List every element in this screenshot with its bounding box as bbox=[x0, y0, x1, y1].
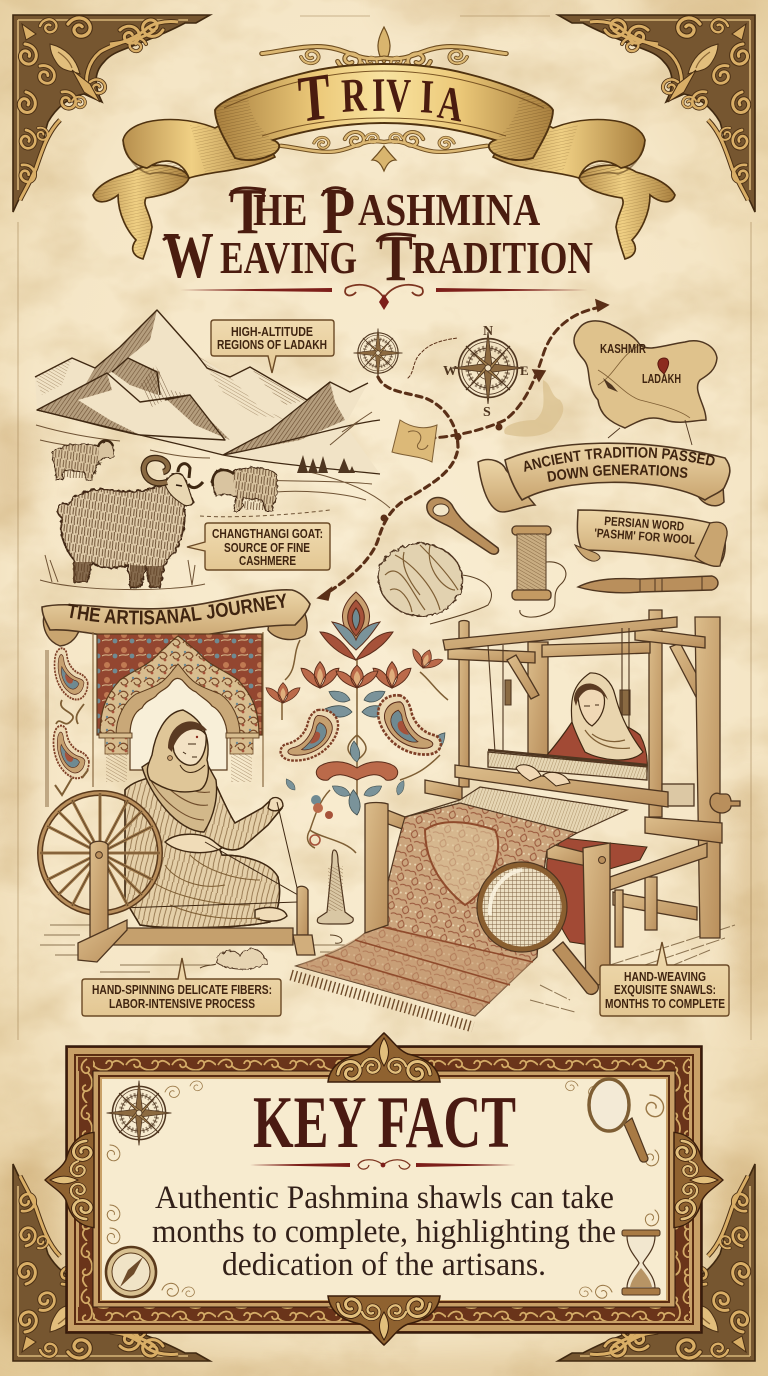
spinning frame base bbox=[113, 928, 293, 945]
ribbon: persian word pashm bbox=[575, 510, 727, 566]
front loom posts bbox=[365, 802, 610, 988]
ground lines bbox=[40, 925, 345, 972]
callout: changthangi goat: CASHMERE bbox=[239, 554, 296, 568]
loom frame back bbox=[443, 610, 720, 938]
callout: changthangi goat: CHANGTHANGI GOAT: bbox=[212, 527, 323, 541]
illustration: small parchment map bbox=[392, 420, 437, 462]
callout: high-altitude regions: HIGH-ALTITUDE bbox=[231, 325, 313, 339]
ornate frame bbox=[66, 1046, 702, 1333]
illustration: wooden spinning tool bbox=[427, 498, 498, 554]
ribbon: ancient tradition: ANCIENT TRADITION PASSED bbox=[524, 446, 715, 472]
illustration: floral paisley motif bbox=[266, 592, 450, 853]
paisleys bbox=[281, 710, 338, 761]
key fact text: dedication of the artisans. bbox=[222, 1247, 546, 1283]
illustration: thread spool bbox=[512, 526, 566, 617]
callout: high-altitude regions: REGIONS OF LADAKH bbox=[217, 338, 327, 352]
icon: pocket compass bbox=[106, 1247, 156, 1297]
callout: changthangi goat: SOURCE OF FINE bbox=[224, 541, 310, 555]
callout: hand-weaving: EXQUISITE SNAWLS: bbox=[614, 983, 716, 997]
callout: hand-weaving: HAND-WEAVING bbox=[624, 970, 706, 984]
illustration: changthangi goats bbox=[40, 440, 330, 590]
map: kashmir and ladakh bbox=[574, 321, 717, 445]
large goat bbox=[40, 458, 205, 590]
decorative corner: top right bbox=[558, 15, 755, 212]
spinning wheel bbox=[40, 793, 160, 913]
illustration: yarn cone bbox=[317, 850, 353, 943]
weaver hands bbox=[516, 765, 570, 786]
heading: trivia: RIVIA bbox=[340, 69, 465, 133]
callout: hand-spinning: HAND-SPINNING DELICATE FIBERS: bbox=[92, 983, 272, 997]
right ribbon tail bbox=[493, 110, 675, 259]
illustration: large compass with cardinal points: N bbox=[483, 324, 493, 339]
main title: P bbox=[322, 175, 355, 248]
ribbon: ancient tradition bbox=[477, 442, 731, 513]
illustration: large compass with cardinal points: S bbox=[483, 405, 491, 420]
red skirt beneath shawl bbox=[547, 838, 647, 945]
left ribbon tail bbox=[93, 110, 275, 259]
ribbon: persian word pashm: 'PASHM' FOR WOOL bbox=[594, 526, 696, 547]
callout: hand-spinning bbox=[82, 958, 281, 1016]
main title: EAVING bbox=[220, 232, 366, 283]
callout: changthangi goat bbox=[187, 523, 330, 570]
illustration: loom with weaver and shawl bbox=[291, 610, 740, 1027]
shawl cloth bbox=[291, 787, 627, 1027]
journey route: dashed arrows bbox=[318, 300, 608, 600]
map: kashmir and ladakh: KASHMIR bbox=[600, 342, 646, 356]
illustration: small compass rose bbox=[354, 329, 402, 377]
icon: compass rose bbox=[107, 1081, 171, 1145]
illustration: mountains of Ladakh bbox=[35, 310, 390, 508]
heading: trivia: T bbox=[296, 60, 333, 137]
callout: hand-spinning: LABOR-INTENSIVE PROCESS bbox=[109, 997, 255, 1011]
callout: high-altitude regions bbox=[211, 320, 334, 373]
inner flourishes bbox=[104, 1081, 666, 1298]
key fact text: months to complete, highlighting the bbox=[152, 1214, 616, 1250]
illustration: faded sketch of india bbox=[504, 380, 563, 437]
key fact text: Authentic Pashmina shawls can take bbox=[155, 1180, 614, 1216]
ribbon: the artisanal journey bbox=[41, 589, 311, 647]
title divider bbox=[180, 285, 588, 310]
heddle frame and beater bbox=[425, 750, 740, 813]
spinner figure bbox=[125, 710, 287, 928]
illustration: large compass with cardinal points: W bbox=[443, 364, 457, 379]
magnifying glass bbox=[477, 862, 598, 994]
callout: hand-weaving bbox=[600, 942, 729, 1016]
illustration: raw wool bundle bbox=[378, 543, 491, 624]
main title: T bbox=[230, 175, 266, 248]
icon: magnifying glass bbox=[589, 1079, 648, 1162]
small goat right bbox=[170, 468, 330, 517]
illustration: weaving shuttle bbox=[578, 576, 718, 593]
ribbon: persian word pashm: PERSIAN WORD bbox=[604, 514, 685, 534]
illustration: large compass with cardinal points: E bbox=[520, 363, 529, 378]
main title: HE bbox=[253, 186, 317, 236]
map: kashmir and ladakh: LADAKH bbox=[642, 372, 681, 386]
illustration: side paisley column bbox=[46, 648, 92, 807]
ribbon: the artisanal journey: THE ARTISANAL JOURNEY bbox=[68, 593, 286, 624]
illustration: ornamental arch panel bbox=[93, 632, 263, 787]
floor hatch bbox=[530, 925, 735, 1012]
key fact divider bbox=[250, 1160, 516, 1169]
main title: ASHMINA bbox=[358, 186, 541, 236]
heading: key fact: KEY FACT bbox=[253, 1082, 516, 1164]
trivia ribbon banner bbox=[93, 27, 675, 259]
key fact text bbox=[152, 1180, 616, 1283]
icon: hourglass bbox=[622, 1230, 660, 1295]
weaver figure bbox=[547, 673, 647, 772]
shaded mountain faces bbox=[35, 310, 345, 455]
ribbon: ancient tradition: DOWN GENERATIONS bbox=[547, 464, 688, 482]
main title: T bbox=[379, 222, 413, 295]
small goat left bbox=[52, 440, 114, 480]
tulips bbox=[301, 662, 339, 688]
top lotus bbox=[320, 592, 393, 660]
decorative corner: top left bbox=[13, 15, 210, 212]
main title bbox=[163, 175, 593, 295]
illustration: large compass with cardinal points bbox=[443, 324, 529, 420]
illustration: wool balls bbox=[200, 949, 268, 969]
grey-blue leaves bbox=[324, 702, 353, 720]
callout: hand-weaving: MONTHS TO COMPLETE bbox=[605, 997, 725, 1011]
decorative corner: bottom left bbox=[13, 1164, 210, 1361]
key fact panel bbox=[45, 1033, 723, 1345]
illustration: woman at spinning wheel bbox=[40, 710, 345, 972]
main title: RADITION bbox=[412, 232, 593, 283]
main ribbon band bbox=[215, 64, 553, 160]
decorative corner: bottom right bbox=[558, 1164, 755, 1361]
side beams bbox=[377, 806, 722, 947]
lower red scroll bbox=[316, 762, 398, 780]
main title: W bbox=[163, 219, 214, 292]
frame cartouches bbox=[45, 1033, 723, 1345]
